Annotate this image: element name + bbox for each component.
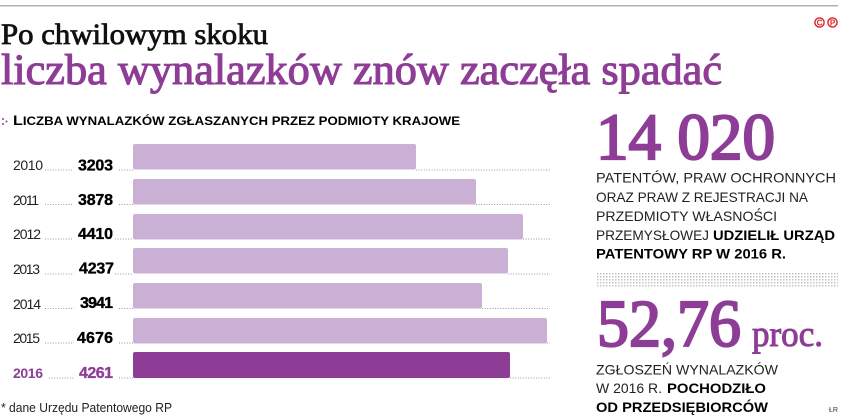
text block: inventions: W 2016 R.: [596, 380, 662, 396]
row 2013: 2013: [13, 261, 40, 277]
row 2011: [13, 179, 550, 209]
text block: patents: [596, 170, 836, 262]
row 2016: 4261: [79, 365, 113, 382]
icon: copyright and phonographic marks: P: [830, 18, 836, 28]
text block: inventions: POCHODZIŁO: [667, 380, 766, 396]
stat: 52,76 proc.: proc.: [752, 314, 823, 354]
footnote: * dane Urzędu Patentowego RP: [1, 401, 172, 415]
row 2014: 3941: [80, 295, 113, 312]
text block: inventions: OD PRZEDSIĘBIORCÓW: [596, 398, 769, 415]
text block: patents: ORAZ PRAW Z REJESTRACJI NA: [596, 189, 809, 205]
row 2012: 2012: [13, 226, 41, 242]
icon: copyright and phonographic marks: [815, 18, 837, 28]
row 2012: 4410: [78, 226, 113, 243]
row 2016: 2016: [13, 365, 43, 381]
row 2010: [13, 144, 550, 174]
text block: patents: PATENTÓW, PRAW OCHRONNYCH: [596, 170, 836, 186]
row 2011: 3878: [78, 192, 113, 209]
author initials: ŁR: [829, 407, 838, 414]
title: liczba wynalazków znów zaczęła spadać: [1, 47, 722, 94]
text block: patents: PRZEDMIOTY WŁASNOŚCI: [596, 207, 777, 224]
icon: copyright and phonographic marks: C: [817, 18, 823, 28]
text block: patents: UDZIELIŁ URZĄD: [713, 227, 835, 243]
row 2010: 3203: [78, 158, 113, 174]
title: [1, 18, 722, 94]
text block: inventions: [596, 362, 779, 415]
row 2015: 4676: [77, 330, 113, 347]
row 2013: [13, 248, 550, 278]
row 2014: [13, 283, 550, 312]
text block: inventions: ZGŁOSZEŃ WYNALAZKÓW: [596, 362, 779, 378]
stat: 52,76 proc.: [597, 287, 823, 361]
row 2011: 2011: [13, 192, 39, 208]
row 2013: 4237: [79, 260, 114, 278]
bar chart: [13, 144, 550, 382]
row 2010: 2010: [13, 157, 43, 173]
row 2014: 2014: [13, 296, 41, 312]
text block: patents: PATENTOWY RP W 2016 R.: [596, 246, 786, 262]
title: Po chwilowym skoku: [1, 18, 268, 51]
dotted divider: [596, 273, 838, 287]
text block: patents: PRZEMYSŁOWEJ: [596, 227, 709, 243]
row 2012: [13, 214, 550, 243]
row 2015: 2015: [13, 330, 40, 346]
row 2016: [13, 352, 550, 382]
stat: 14 020: 14 020: [596, 101, 775, 174]
chart heading: LICZBA WYNALAZKÓW ZGŁASZANYCH PRZEZ PODMIOTY KRAJOWE: [13, 112, 460, 128]
stat: 52,76 proc.: 52,76: [597, 287, 741, 361]
row 2015: [13, 318, 550, 347]
